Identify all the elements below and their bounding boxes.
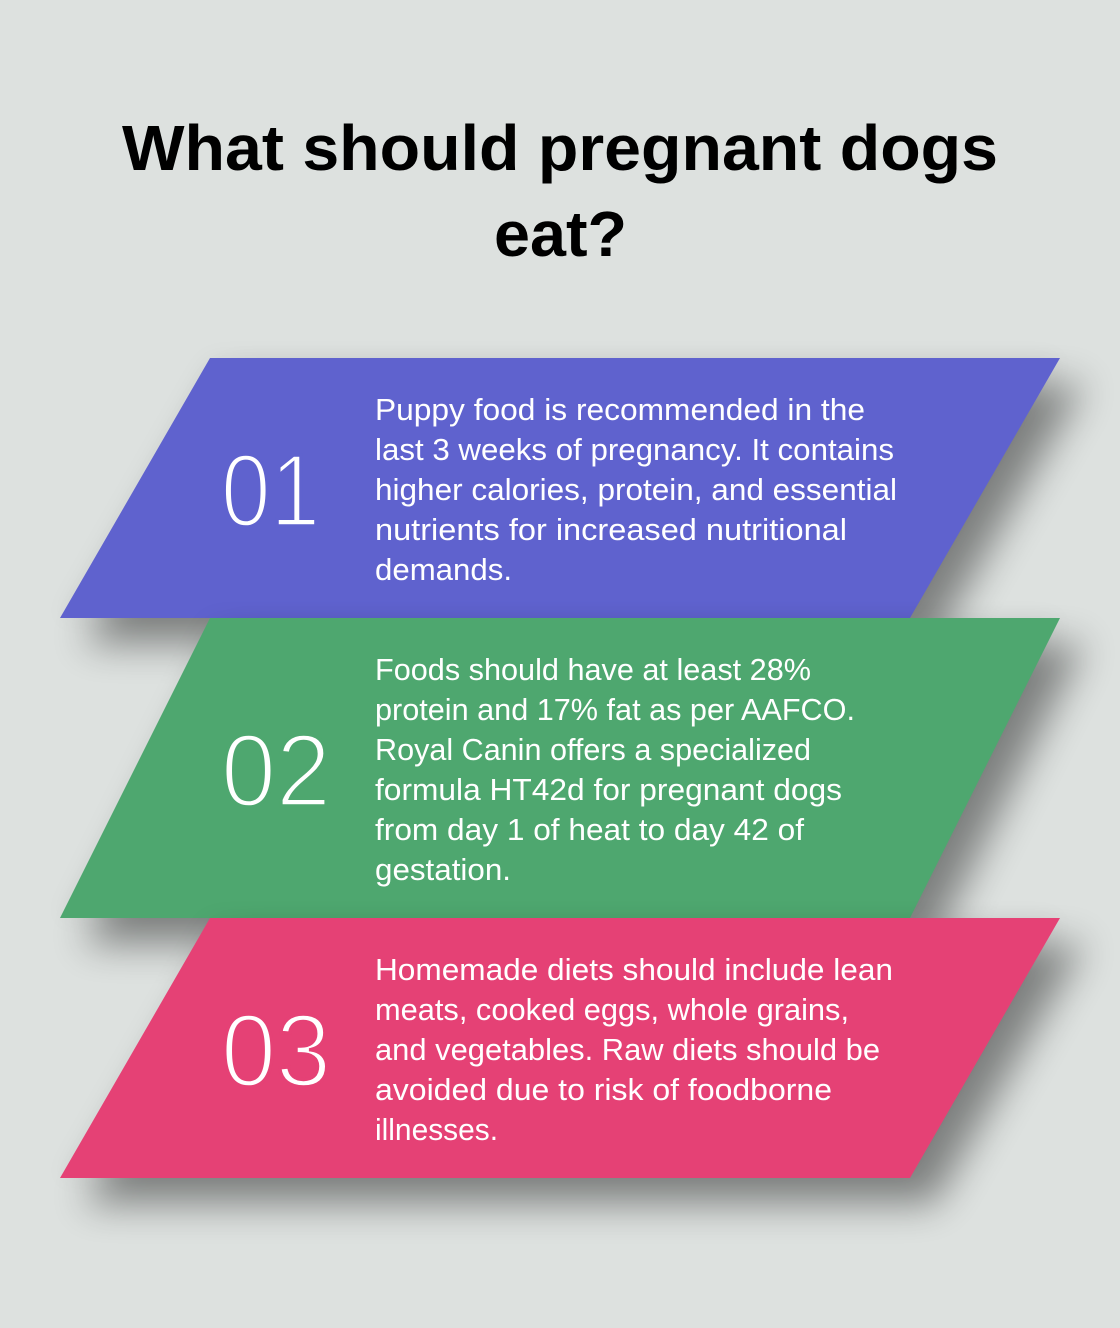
panel: step 01 [60, 358, 1060, 618]
number 01: 01 [221, 433, 320, 548]
number 02: 02 [221, 713, 331, 828]
text block: step 03 [375, 952, 893, 1147]
text block: step 03: Homemade diets should include lean [375, 952, 893, 987]
text block: step 02: formula HT42d for pregnant dogs [375, 772, 842, 807]
text block: step 03: and vegetables. Raw diets should be [375, 1032, 880, 1067]
panel shape: pink parallelogram [60, 918, 1060, 1178]
text block: step 03: meats, cooked eggs, whole grains, [375, 992, 849, 1027]
text block: step 02 [375, 652, 855, 887]
text block: step 01: demands. [375, 552, 512, 587]
text block: step 03: avoided due to risk of foodborne [375, 1072, 832, 1107]
text block: step 01: higher calories, protein, and essential [375, 472, 897, 507]
text block: step 01 [375, 392, 897, 587]
text block: step 03: illnesses. [375, 1112, 498, 1147]
panel: step 02 [60, 618, 1060, 918]
text block: step 02: protein and 17% fat as per AAFCO. [375, 692, 855, 727]
text block: step 02: gestation. [375, 852, 511, 887]
panel: step 03 [60, 918, 1060, 1178]
text block: step 01: last 3 weeks of pregnancy. It contains [375, 432, 894, 467]
text block: step 02: Foods should have at least 28% [375, 652, 811, 687]
number 03: 03 [221, 993, 331, 1108]
panel shape: green parallelogram [60, 618, 1060, 918]
title: What should pregnant dogs [122, 112, 998, 184]
title [122, 112, 998, 270]
title: eat? [494, 198, 627, 270]
text block: step 02: from day 1 of heat to day 42 of [375, 812, 804, 847]
text block: step 01: Puppy food is recommended in the [375, 392, 865, 427]
panel shape: blue parallelogram [60, 358, 1060, 618]
text block: step 02: Royal Canin offers a specialized [375, 732, 811, 767]
text block: step 01: nutrients for increased nutritional [375, 512, 847, 547]
